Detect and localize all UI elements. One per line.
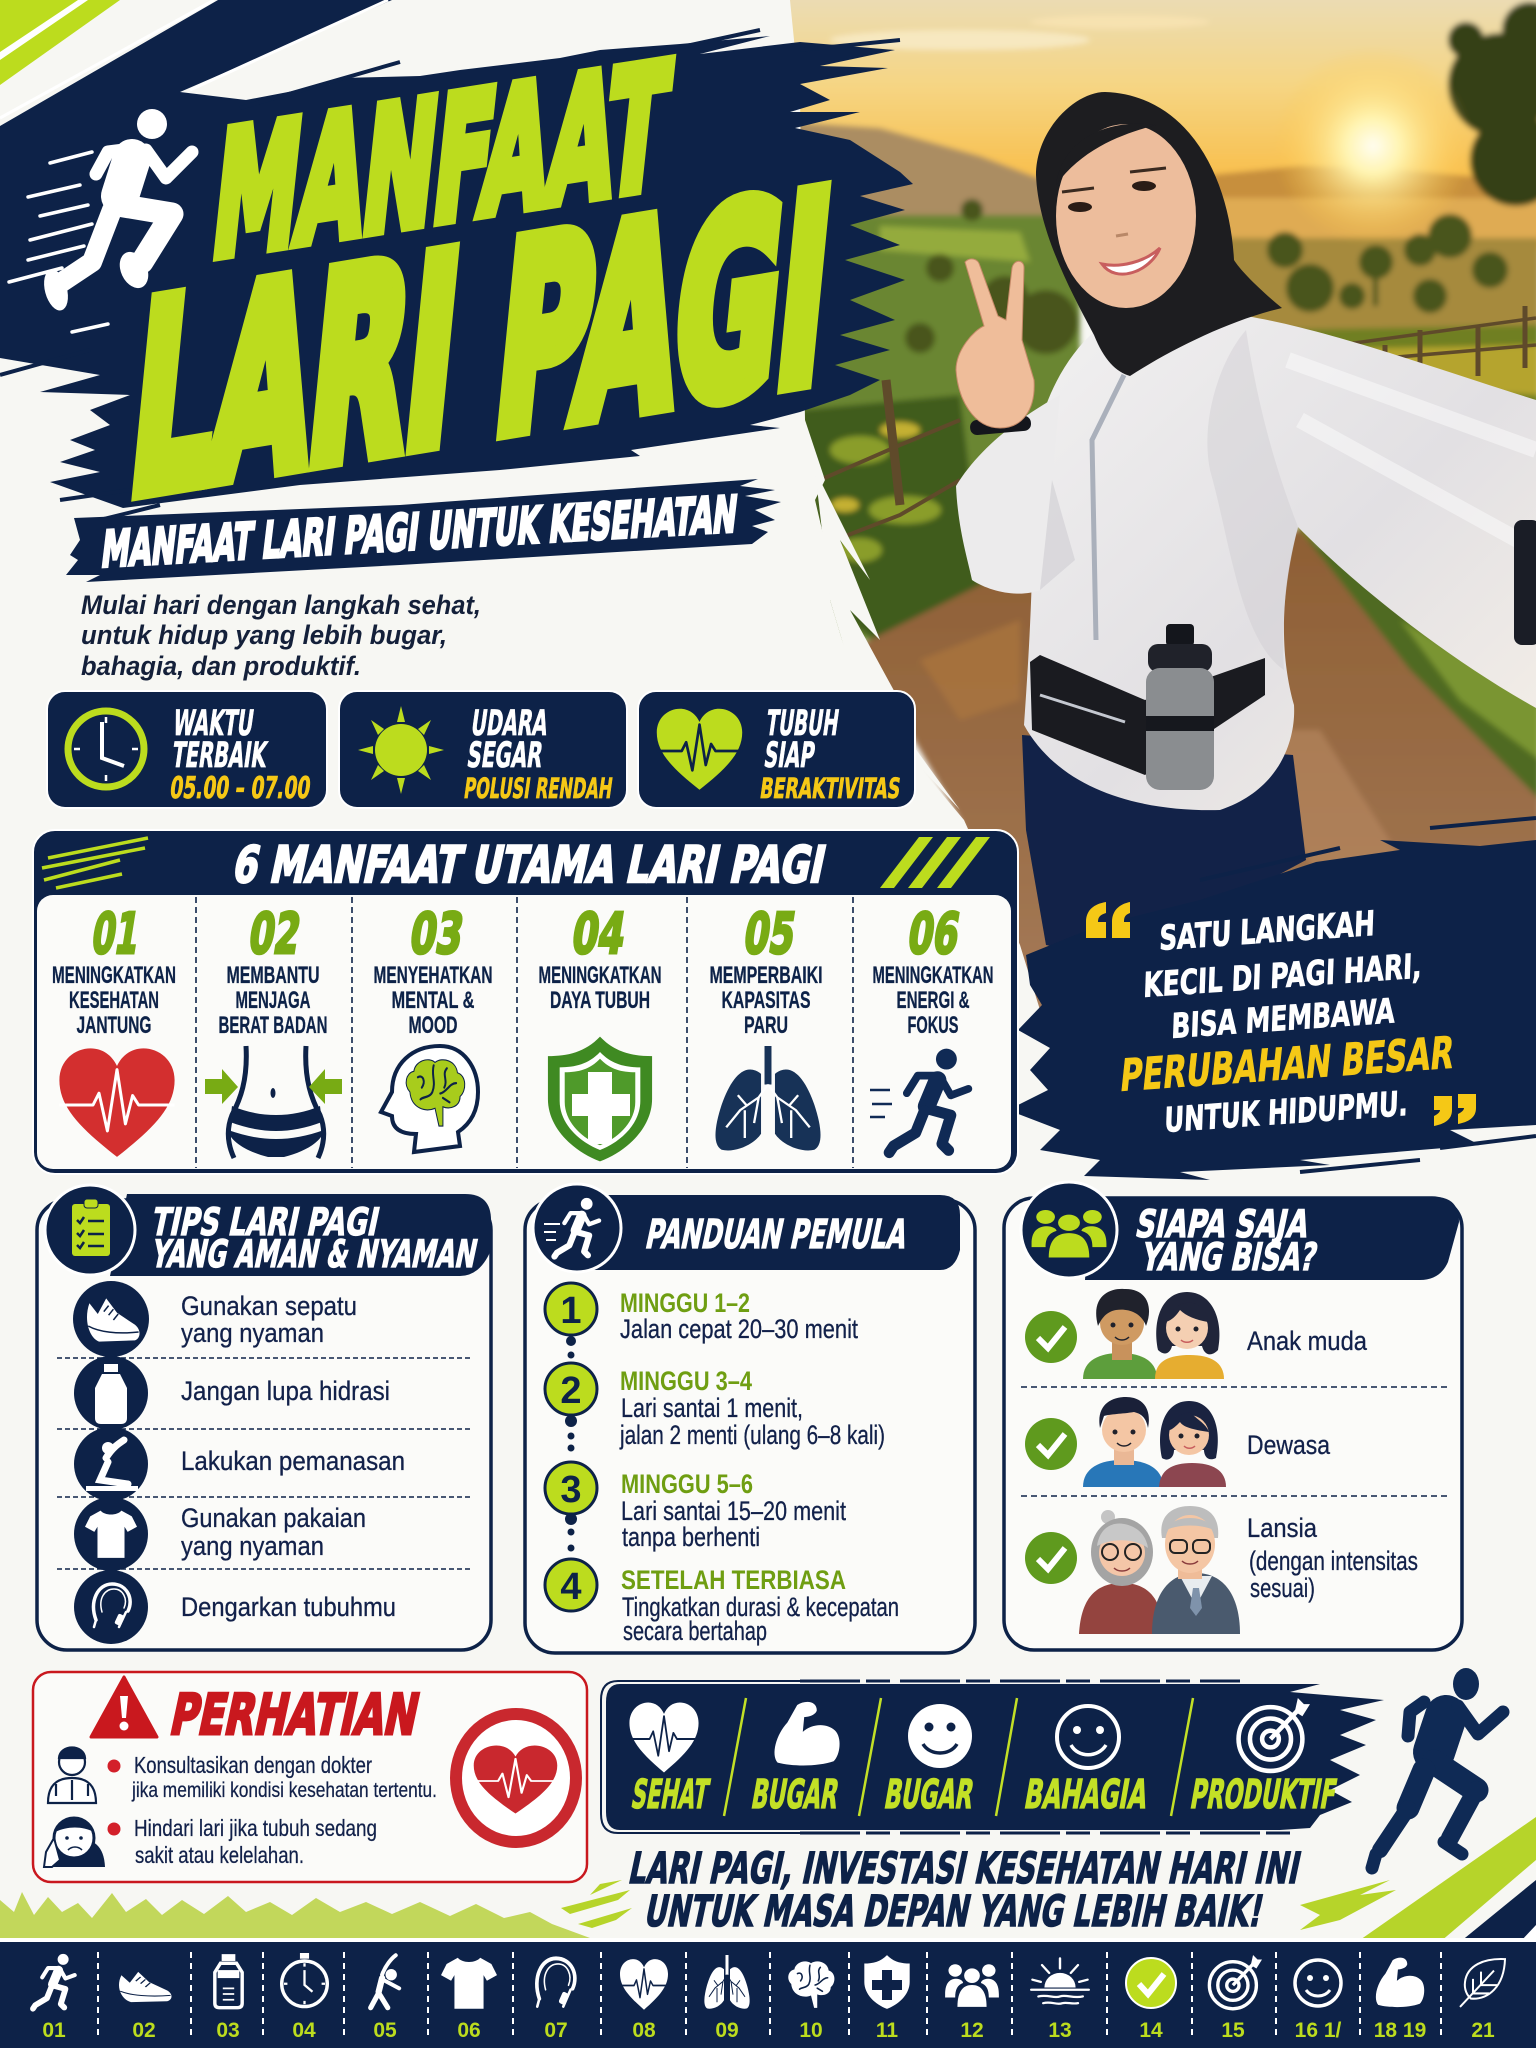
tip: dengarkan tubuh: Dengarkan tubuhmu: [181, 1592, 396, 1622]
benefit 03: MENYEHATKAN: [374, 962, 492, 989]
icon 12: [945, 1964, 999, 2042]
icon 13: 13: [1048, 2019, 1072, 2042]
quote text: KECIL DI PAGI HARI,: [1143, 946, 1422, 1006]
benefit 04: MENINGKATKAN: [538, 962, 662, 989]
big tree: [1448, 2, 1536, 206]
info pill: tubuh siap: [638, 691, 915, 808]
warning item 1: jika memiliki kondisi kesehatan tertentu.: [131, 1779, 437, 1802]
info pill: udara segar: [339, 691, 627, 808]
benefit 06: MENINGKATKAN: [872, 962, 994, 989]
panel: panduan pemula: [525, 1184, 975, 1653]
panel: perhatian: PERHATIAN: [165, 1683, 425, 1748]
benefit 05: MEMPERBAIKI: [710, 962, 822, 989]
icon 10: 10: [799, 2019, 823, 2042]
icon: runner: [544, 1198, 599, 1257]
benefit 01: [52, 902, 176, 1157]
closing slogan: [625, 1844, 1305, 1937]
water bottle: [1146, 624, 1214, 790]
panel: siapa saja yang bisa: SIAPA SAJA: [1132, 1202, 1314, 1247]
eyes and smile: [1062, 168, 1166, 274]
quote text: UNTUK HIDUPMU.: [1164, 1084, 1408, 1141]
step 1: Jalan cepat 20–30 menit: [620, 1314, 858, 1344]
step connector: [565, 1336, 577, 1552]
icon 04: [282, 1953, 327, 2042]
intro paragraph: bahagia, dan produktif.: [81, 651, 361, 681]
panel header: [1085, 1197, 1459, 1280]
benefit 05: [710, 902, 822, 1150]
step 4: 4: [560, 1566, 582, 1608]
tip: sepatu: Gunakan sepatu: [181, 1291, 357, 1321]
info pill: waktu terbaik: WAKTU: [171, 703, 256, 744]
icon 09: [704, 1955, 750, 2042]
panel header: [590, 1195, 960, 1270]
title: LARI PAGI: LARI PAGI: [120, 139, 842, 554]
benefit 06: 06: [904, 902, 964, 967]
corner lime stripes: [0, 0, 120, 85]
item: produktif target: [1187, 1698, 1340, 1818]
dividers: [724, 1698, 1193, 1816]
icon 15: [1209, 1955, 1262, 2042]
icon 02: 02: [132, 2019, 156, 2042]
benefit 06: [870, 902, 994, 1153]
icon 09: 09: [715, 2019, 739, 2042]
lime streaks: [561, 1817, 1536, 1942]
step 2: 2: [560, 1370, 582, 1412]
info pill: udara segar: SEGAR: [465, 735, 545, 776]
decor stripes: [880, 837, 990, 888]
navy runner silhouette: [1372, 1668, 1503, 1868]
benefit 02: 02: [245, 902, 305, 967]
row: anak muda: [1025, 1289, 1368, 1379]
row: lansia: sesuai): [1250, 1573, 1315, 1603]
pants: [1022, 735, 1306, 960]
info pill: udara segar: POLUSI RENDAH: [462, 772, 615, 805]
icon 15: 15: [1221, 2019, 1245, 2042]
step 3: [545, 1462, 846, 1552]
info pill: tubuh siap: TUBUH: [764, 703, 841, 744]
panel: perhatian: [33, 1672, 587, 1882]
warning item 2: Hindari lari jika tubuh sedang: [134, 1815, 377, 1841]
footer icon strip: [0, 1938, 1536, 2048]
panel heading: 6 MANFAAT UTAMA LARI PAGI: [228, 836, 831, 894]
tip: sepatu: yang nyaman: [181, 1318, 324, 1348]
row: anak muda: Anak muda: [1247, 1326, 1368, 1356]
icon 11: [864, 1955, 910, 2042]
info pill: waktu terbaik: TERBAIK: [170, 735, 270, 776]
peace hand: [956, 259, 1034, 428]
icon 18: 18 19: [1374, 2019, 1426, 2042]
fields: [790, 215, 1080, 640]
step 2: Lari santai 1 menit,: [621, 1393, 803, 1423]
step 4: Tingkatkan durasi & kecepatan: [622, 1592, 899, 1622]
step 4: [545, 1559, 899, 1646]
icon: sun: [358, 706, 444, 794]
panel: siapa saja yang bisa: YANG BISA?: [1137, 1235, 1321, 1280]
intro paragraph: untuk hidup yang lebih bugar,: [81, 620, 447, 650]
woman runner taking a selfie: [956, 92, 1536, 960]
benefit 03: [374, 902, 492, 1152]
icon 21: 21: [1471, 2019, 1495, 2042]
tip: pakaian: yang nyaman: [181, 1531, 324, 1561]
closing quotation mark: [1434, 1094, 1476, 1126]
icon: red heart: [59, 1048, 175, 1157]
tip: pakaian: Gunakan pakaian: [181, 1503, 366, 1533]
benefit 05: KAPASITAS: [722, 987, 810, 1014]
step 3: Lari santai 15–20 menit: [621, 1496, 846, 1526]
icon 03: [215, 1954, 242, 2042]
benefit 02: MENJAGA: [236, 987, 310, 1014]
subtitle banner: [66, 479, 781, 582]
warning item 1: [108, 1752, 437, 1802]
step 2: [545, 1363, 885, 1450]
benefit 03: MOOD: [408, 1012, 458, 1039]
quote text: BISA MEMBAWA: [1171, 991, 1396, 1047]
item: bugar arm: BUGAR: [748, 1771, 842, 1818]
icon 06: 06: [457, 2019, 481, 2042]
icon: clock: [68, 711, 144, 787]
decor scribble: [42, 838, 148, 888]
benefits banner: [601, 1681, 1384, 1833]
benefit 05: 05: [740, 902, 800, 967]
icon: warning triangle: [91, 1677, 157, 1737]
row: lansia: Lansia: [1247, 1513, 1318, 1543]
face: [1056, 124, 1196, 308]
icon 03: 03: [216, 2019, 240, 2042]
step 2: jalan 2 menti (ulang 6–8 kali): [619, 1420, 885, 1450]
icon: clipboard: [72, 1199, 110, 1256]
item: sehat: [628, 1703, 713, 1818]
benefit 01: MENINGKATKAN: [52, 962, 176, 989]
icon 05: [371, 1955, 399, 2042]
running belt: [1030, 655, 1265, 775]
icon 02: [119, 1972, 172, 2042]
benefit 04: [538, 902, 662, 1161]
benefit 03: MENTAL &: [392, 987, 474, 1014]
icon 06: [441, 1958, 497, 2042]
intro paragraph: [81, 590, 481, 681]
panel: siapa saja yang bisa: [1004, 1182, 1462, 1650]
item: bahagia smile: [1021, 1706, 1151, 1818]
opening quotation mark: [1086, 902, 1130, 938]
benefit 06: FOKUS: [908, 1012, 958, 1039]
panel: tips lari pagi: [37, 1185, 491, 1650]
benefit 02: [205, 902, 342, 1158]
icon 01: 01: [42, 2019, 66, 2042]
icon 04: 04: [292, 2019, 316, 2042]
icon 01: [33, 1954, 75, 2042]
left shrubs: [800, 395, 985, 650]
icon: shield with cross: [548, 1037, 652, 1161]
item: bugar arm: [748, 1702, 842, 1818]
dirt path: [860, 530, 1536, 1020]
tip: hidrasi: Jangan lupa hidrasi: [181, 1376, 390, 1406]
benefit 01: JANTUNG: [76, 1012, 152, 1039]
icon: people group: [1032, 1210, 1106, 1258]
icon 16: 16 1/: [1295, 2019, 1342, 2042]
icon 14: [1126, 1958, 1176, 2042]
panel: 6 manfaat utama: [33, 830, 1018, 1174]
step 4: SETELAH TERBIASA: [621, 1565, 846, 1595]
panel: tips lari pagi: TIPS LARI PAGI: [148, 1200, 383, 1245]
step 3: MINGGU 5–6: [621, 1469, 753, 1499]
panel header: [110, 1194, 491, 1276]
icon: head with brain: [381, 1046, 478, 1152]
item: produktif target: PRODUKTIF: [1187, 1771, 1340, 1818]
benefit 04: DAYA TUBUH: [550, 987, 650, 1014]
tip: pemanasan: [74, 1427, 405, 1501]
tip: pakaian: [74, 1497, 366, 1571]
jacket: torso and arms: [1024, 308, 1536, 810]
tip: hidrasi: [74, 1356, 390, 1430]
quote brush panel: [1008, 818, 1536, 1180]
step 2: MINGGU 3–4: [620, 1366, 752, 1396]
icon 05: 05: [373, 2019, 397, 2042]
step 1: MINGGU 1–2: [620, 1288, 750, 1318]
warning item 1: Konsultasikan dengan dokter: [134, 1752, 372, 1778]
quote text: [1118, 904, 1456, 1141]
right shrubs: [1300, 535, 1536, 800]
icon: doctor: [48, 1748, 96, 1803]
distant ridges: [800, 122, 1043, 220]
title brush background: [0, 0, 913, 520]
icon 10: [788, 1961, 834, 2042]
quote text: SATU LANGKAH: [1159, 904, 1376, 959]
panel: panduan pemula: PANDUAN PEMULA: [642, 1210, 912, 1258]
icon 08: 08: [632, 2019, 656, 2042]
row: lansia: (dengan intensitas: [1249, 1546, 1418, 1576]
icon: runner: [870, 1049, 968, 1153]
wrist cuff: [970, 415, 1032, 436]
step 4: secara bertahap: [623, 1616, 767, 1646]
item: sehat: SEHAT: [628, 1771, 713, 1818]
grass texture strip: [0, 1892, 590, 1938]
item: bahagia smile: BAHAGIA: [1021, 1771, 1151, 1818]
icon 14: 14: [1139, 2019, 1163, 2042]
icon 12: 12: [960, 2019, 984, 2042]
icon 21: [1460, 1959, 1505, 2042]
icon 13: [1031, 1958, 1089, 2042]
subtitle banner: MANFAAT LARI PAGI UNTUK KESEHATAN: [99, 484, 741, 579]
info pill: waktu terbaik: [47, 691, 327, 808]
hijab: [1036, 92, 1282, 376]
warning item 2: [108, 1815, 377, 1868]
step 1: 1: [560, 1290, 582, 1332]
benefit 06: ENERGI &: [896, 987, 970, 1014]
benefit 03: 03: [406, 902, 468, 967]
icon 07: 07: [544, 2019, 568, 2042]
benefit 05: PARU: [744, 1012, 788, 1039]
intro paragraph: Mulai hari dengan langkah sehat,: [81, 590, 481, 620]
warning item 2: sakit atau kelelahan.: [135, 1842, 304, 1868]
row: dewasa: Dewasa: [1247, 1430, 1331, 1460]
row: dewasa: [1025, 1397, 1331, 1487]
tip: dengarkan tubuh: [74, 1570, 396, 1644]
info pill: waktu terbaik: 05.00 – 07.00: [168, 771, 313, 806]
horizon trees: [905, 199, 1508, 354]
icon: sick person: [44, 1818, 105, 1867]
icon: heart in red ring: [456, 1714, 576, 1842]
panel: tips lari pagi: YANG AMAN & NYAMAN: [147, 1232, 481, 1277]
step 3: 3: [560, 1469, 582, 1511]
benefit 02: BERAT BADAN: [218, 1012, 328, 1039]
icon: lungs: [715, 1046, 821, 1150]
step 3: tanpa berhenti: [622, 1522, 760, 1552]
icon 18: [1374, 1958, 1426, 2042]
benefit 01: 01: [88, 902, 144, 967]
benefit 01: KESEHATAN: [69, 987, 159, 1014]
info pill: tubuh siap: SIAP: [762, 735, 817, 776]
icon 16: [1295, 1960, 1342, 2042]
info pill: udara segar: UDARA: [469, 703, 551, 744]
tip: pemanasan: Lakukan pemanasan: [181, 1446, 405, 1476]
benefit 02: MEMBANTU: [226, 962, 320, 989]
fences: [820, 306, 1536, 540]
icon 08: [620, 1959, 668, 2042]
tip: sepatu: [73, 1281, 357, 1357]
white brush edge over photo: [815, 470, 960, 810]
step 1: [545, 1283, 858, 1344]
white runner with speed lines: [9, 109, 192, 332]
icon: heart with pulse: [657, 709, 742, 790]
item: bugar smile: BUGAR: [881, 1771, 977, 1818]
photo: morning landscape with dirt path: [780, 0, 1536, 1020]
row: lansia: [1025, 1506, 1418, 1634]
info pill: tubuh siap: BERAKTIVITAS: [758, 772, 903, 805]
benefit 04: 04: [568, 902, 630, 967]
icon 07: [537, 1958, 575, 2042]
item: bugar smile: [881, 1704, 977, 1818]
sun glow: [1286, 56, 1466, 230]
icon 11: 11: [876, 2019, 898, 2042]
icon: waist with arrows: [205, 1046, 342, 1158]
